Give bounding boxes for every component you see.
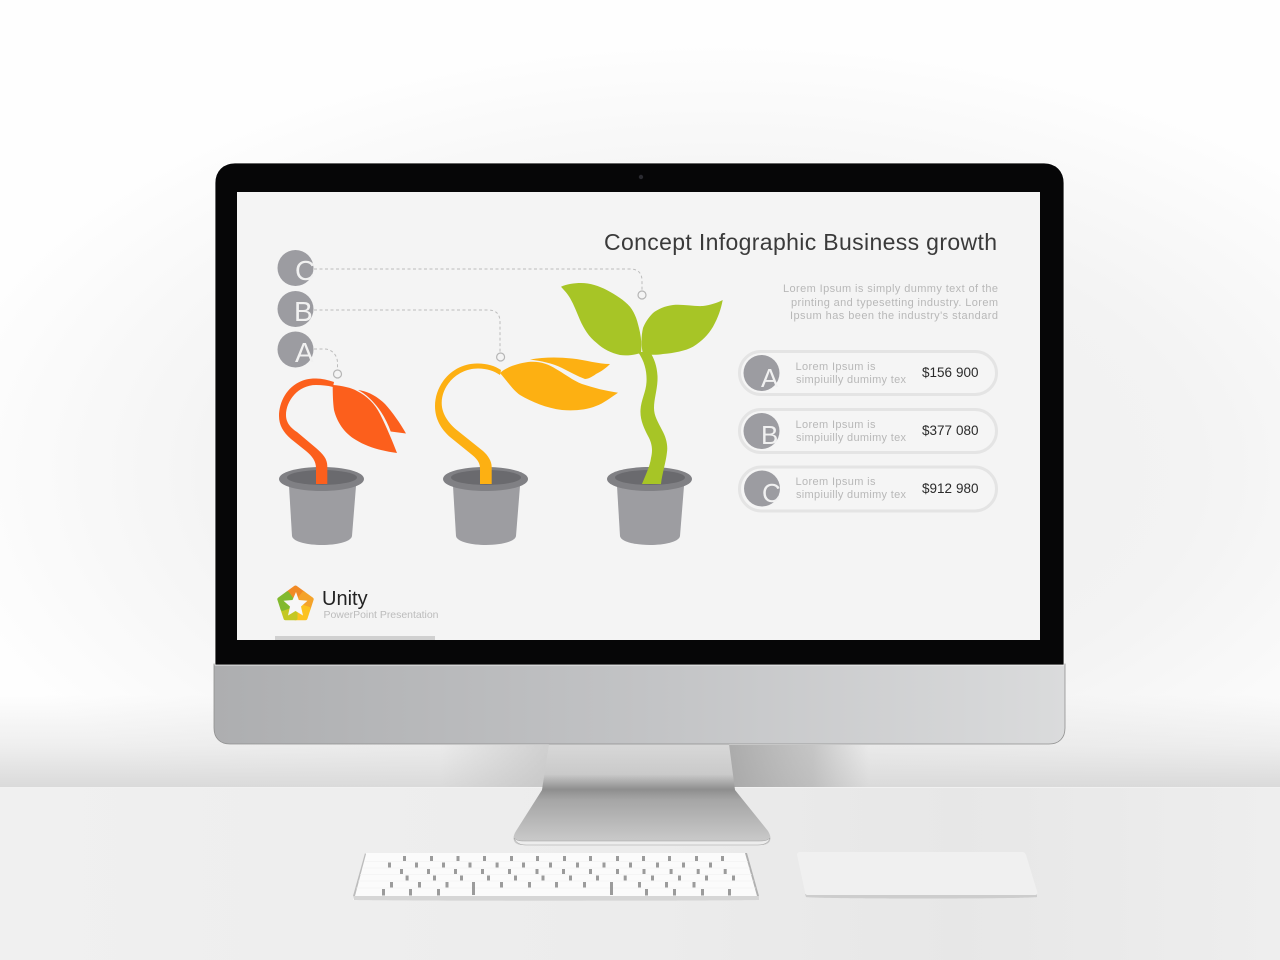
monitor stand	[514, 744, 770, 845]
badge B	[278, 291, 314, 327]
description text	[783, 283, 998, 322]
pill C: $912	[922, 481, 952, 496]
stem B	[435, 363, 501, 484]
stem A	[279, 378, 334, 484]
description text: printing and typesetting industry. Lorem	[791, 297, 998, 309]
description text: Ipsum has been the industry's standard	[790, 310, 998, 322]
monitor chin	[214, 664, 1065, 744]
pill A: Lorem Ipsum is	[796, 361, 876, 373]
connector end dots	[334, 291, 646, 378]
connector lines	[314, 269, 642, 370]
logo star icon	[279, 588, 312, 618]
leaf C right	[642, 300, 723, 355]
leaf B main	[500, 362, 618, 410]
leaf C left	[561, 283, 641, 355]
logo subtitle: PowerPoint Presentation	[324, 609, 439, 621]
pill B: Lorem Ipsum is	[796, 419, 876, 431]
pill C: Lorem Ipsum is	[796, 476, 876, 488]
plant A: wilted orange	[279, 378, 406, 545]
plant C: healthy green	[561, 283, 723, 545]
pill A: A	[761, 363, 779, 393]
keyboard	[353, 853, 759, 901]
leaf A main	[333, 385, 397, 453]
badge C: C	[295, 255, 315, 286]
trackpad	[797, 852, 1037, 898]
badge B: B	[294, 296, 313, 327]
title: Concept Infographic Business growth	[604, 229, 997, 255]
pill A: $156	[922, 365, 952, 380]
pill B: B	[761, 420, 778, 450]
monitor	[214, 163, 1065, 744]
pill B: simpiuilly dumimy tex	[796, 432, 906, 444]
stem C	[638, 352, 667, 484]
pot B	[443, 467, 528, 545]
pill C: 980	[956, 481, 979, 496]
pill B: $377	[922, 423, 952, 438]
logo name: Unity	[322, 588, 368, 610]
pill B	[740, 410, 996, 452]
key gaps	[382, 856, 735, 896]
plant B: drooping yellow	[435, 357, 618, 545]
screen	[237, 192, 1040, 640]
pill B: 080	[956, 423, 979, 438]
badge C	[278, 250, 315, 286]
camera	[639, 175, 643, 179]
pill C	[740, 467, 996, 511]
badge A	[278, 332, 314, 368]
badge A: A	[295, 337, 314, 368]
leaf B rear	[530, 357, 610, 379]
pill C: C	[762, 478, 781, 508]
pot A	[279, 467, 364, 545]
pill A: simpiuilly dumimy tex	[796, 374, 906, 386]
pill C: simpiuilly dumimy tex	[796, 489, 906, 501]
leaf A rear	[358, 390, 406, 434]
pot C	[607, 467, 692, 545]
logo	[275, 588, 439, 640]
pill A: 900	[956, 365, 979, 380]
logo underline bar	[275, 636, 435, 640]
pill A	[740, 352, 996, 394]
description text: Lorem Ipsum is simply dummy text of the	[783, 283, 998, 295]
monitor bezel	[215, 163, 1064, 665]
